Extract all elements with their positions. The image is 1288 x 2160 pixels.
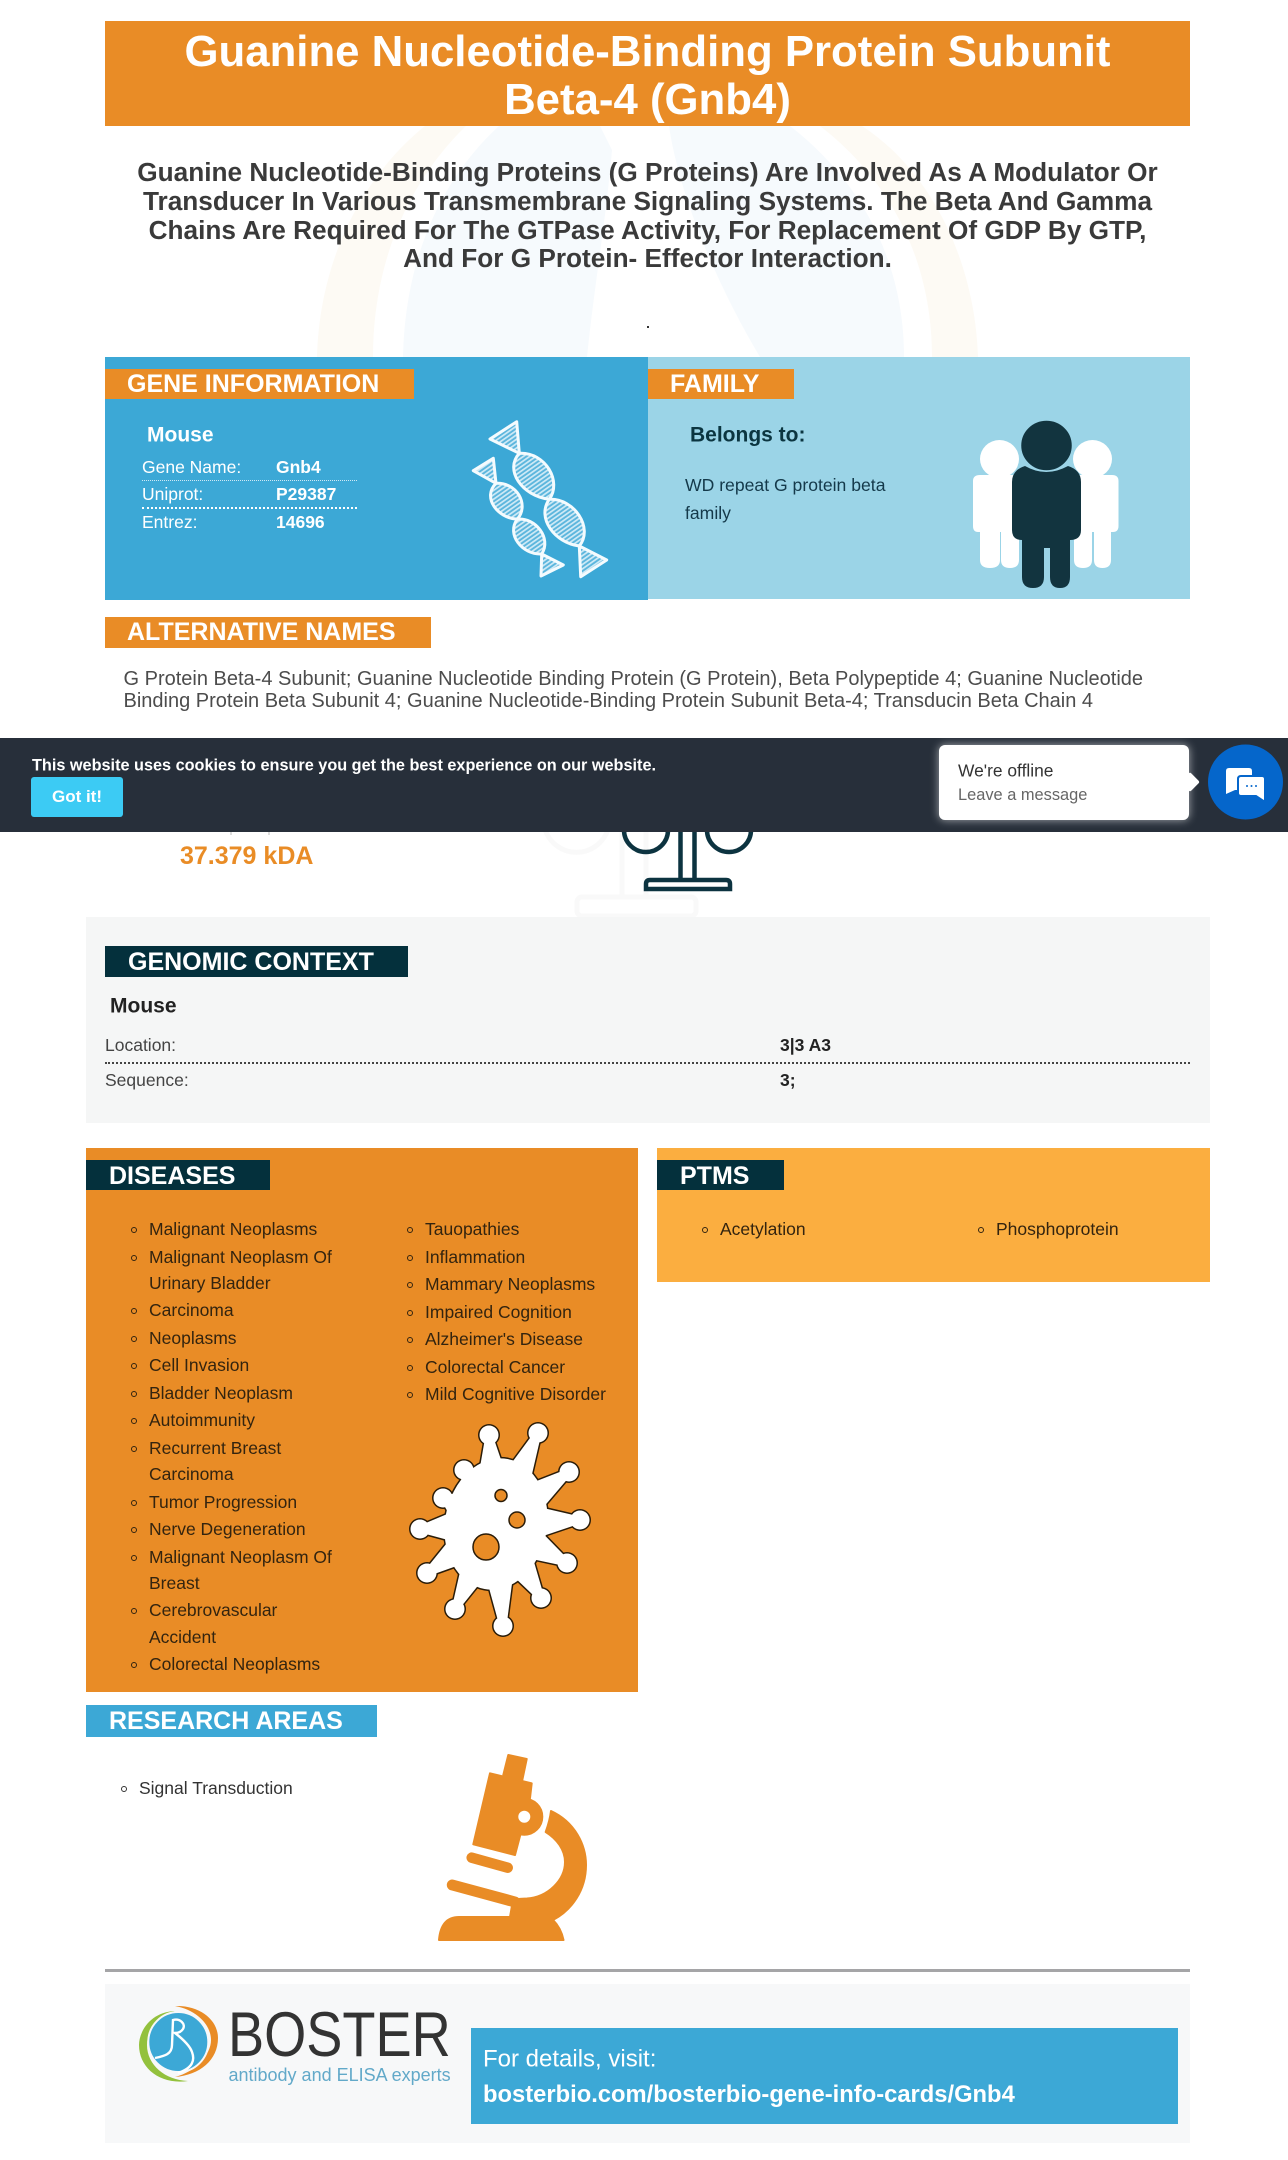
diseases list right column: Mammary Neoplasms xyxy=(425,1274,595,1294)
diseases list left column: Cell Invasion xyxy=(149,1355,249,1375)
panel: ptms xyxy=(657,1148,1210,1282)
intro description xyxy=(137,157,1158,273)
diseases list left column: Malignant Neoplasm Of xyxy=(149,1547,332,1567)
alternative names text: G Protein Beta-4 Subunit; Guanine Nucleotide Binding Protein (G Protein), Beta Polypeptide 4; Guanine Nucleotide xyxy=(124,668,1143,690)
entrez row xyxy=(142,512,325,532)
intro description: And For G Protein- Effector Interaction. xyxy=(403,243,892,273)
diseases list left column: Colorectal Neoplasms xyxy=(149,1654,320,1674)
gene name row: Gene Name: xyxy=(142,457,241,477)
species label: Mouse xyxy=(147,423,214,446)
sequence row: 3; xyxy=(780,1070,796,1090)
diseases list left column: Tumor Progression xyxy=(149,1492,297,1512)
heading: genomic context: GENOMIC CONTEXT xyxy=(128,948,374,976)
diseases list left column: Carcinoma xyxy=(149,1464,234,1484)
heading: family: FAMILY xyxy=(670,370,759,398)
diseases list left column: Malignant Neoplasms xyxy=(149,1219,317,1239)
background watermark logo xyxy=(317,126,978,357)
details label: For details, visit: xyxy=(483,2046,656,2073)
cookie button xyxy=(31,777,123,817)
diseases list left column: Nerve Degeneration xyxy=(149,1519,306,1539)
cookie button: Got it! xyxy=(52,787,102,806)
location row: 3|3 A3 xyxy=(780,1035,831,1055)
chat callout xyxy=(939,745,1189,820)
diseases list right column: Impaired Cognition xyxy=(425,1302,572,1322)
diseases list left column: Neoplasms xyxy=(149,1328,237,1348)
diseases list left column: Accident xyxy=(149,1627,216,1647)
details callout xyxy=(471,2028,1178,2124)
diseases list left column: Urinary Bladder xyxy=(149,1273,271,1293)
ptm item: phosphoprotein: Phosphoprotein xyxy=(996,1219,1119,1239)
gene name row xyxy=(142,454,357,481)
leave a message text: Leave a message xyxy=(958,786,1087,804)
heading: ptms: PTMS xyxy=(680,1162,749,1190)
diseases list left column: Autoimmunity xyxy=(149,1410,255,1430)
panel: family xyxy=(648,357,1190,599)
panel: genomic context xyxy=(86,917,1210,1123)
logo tagline: antibody and ELISA experts xyxy=(228,2065,451,2085)
panel: gene information xyxy=(105,357,648,600)
heading: research areas: RESEARCH AREAS xyxy=(109,1707,343,1735)
diseases list right column: Mild Cognitive Disorder xyxy=(425,1384,606,1404)
cookie bar xyxy=(0,738,1288,832)
details url: bosterbio.com/bosterbio-gene-info-cards/Gnb4 xyxy=(483,2081,1015,2108)
diseases list right column: Tauopathies xyxy=(425,1219,519,1239)
cookie notice text: This website uses cookies to ensure you get the best experience on our website. xyxy=(32,756,656,774)
offline text: We're offline xyxy=(958,761,1053,781)
title banner xyxy=(105,21,1190,126)
sequence row xyxy=(105,1070,796,1090)
location row xyxy=(105,1031,1190,1064)
heading: diseases: DISEASES xyxy=(109,1162,235,1190)
diseases list right column: Alzheimer's Disease xyxy=(425,1329,583,1349)
diseases list right column: Colorectal Cancer xyxy=(425,1357,565,1377)
location row: Location: xyxy=(105,1035,176,1055)
alternative names text: Binding Protein Beta Subunit 4; Guanine Nucleotide-Binding Protein Subunit Beta-4; Transducin Beta Chain 4 xyxy=(124,690,1093,712)
heading: ptms xyxy=(657,1160,784,1190)
heading: diseases xyxy=(86,1160,270,1190)
panel: footer xyxy=(105,1984,1190,2143)
uniprot row xyxy=(142,481,357,509)
panel: diseases xyxy=(86,1148,638,1692)
research area item: Signal Transduction xyxy=(139,1778,293,1798)
diseases list left column: Cerebrovascular xyxy=(149,1600,277,1620)
callout pointer xyxy=(1180,772,1200,792)
heading: alternative names: ALTERNATIVE NAMES xyxy=(127,618,396,646)
ptm item: acetylation: Acetylation xyxy=(720,1219,806,1239)
sequence row: Sequence: xyxy=(105,1070,189,1090)
entrez row: 14696 xyxy=(276,512,325,532)
diseases list left column xyxy=(131,1219,332,1674)
diseases list left column: Malignant Neoplasm Of xyxy=(149,1247,332,1267)
family description xyxy=(685,475,886,523)
logo: boster xyxy=(139,2000,451,2085)
small dot xyxy=(647,326,649,328)
diseases list left column: Carcinoma xyxy=(149,1300,234,1320)
title banner: Guanine Nucleotide-Binding Protein Subunit xyxy=(184,27,1110,76)
diseases list right column xyxy=(407,1219,606,1404)
title banner: Beta-4 (Gnb4) xyxy=(504,75,791,124)
intro description: Chains Are Required For The GTPase Activity, For Replacement Of GDP By GTP, xyxy=(149,215,1146,245)
diseases list left column: Recurrent Breast xyxy=(149,1438,281,1458)
logo wordmark: BOSTER xyxy=(228,2000,451,2070)
divider line xyxy=(105,1969,1190,1972)
alternative names text xyxy=(124,668,1143,712)
family description: family xyxy=(685,503,731,523)
diseases list left column: Breast xyxy=(149,1573,200,1593)
heading: gene information: GENE INFORMATION xyxy=(127,370,379,398)
species label: Mouse xyxy=(110,994,177,1017)
intro description: Guanine Nucleotide-Binding Proteins (G Proteins) Are Involved As A Modulator Or xyxy=(137,157,1158,187)
gene name row: Gnb4 xyxy=(276,457,321,477)
diseases list right column: Inflammation xyxy=(425,1247,525,1267)
entrez row: Entrez: xyxy=(142,512,197,532)
intro description: Transducer In Various Transmembrane Signaling Systems. The Beta And Gamma xyxy=(143,186,1152,216)
family description: WD repeat G protein beta xyxy=(685,475,885,495)
uniprot row: P29387 xyxy=(276,484,336,504)
belongs to label: Belongs to: xyxy=(690,423,806,446)
uniprot row: Uniprot: xyxy=(142,484,203,504)
heading: family xyxy=(648,369,794,399)
diseases list left column: Bladder Neoplasm xyxy=(149,1383,293,1403)
molecular weight value: 37.379 kDA xyxy=(180,842,313,870)
